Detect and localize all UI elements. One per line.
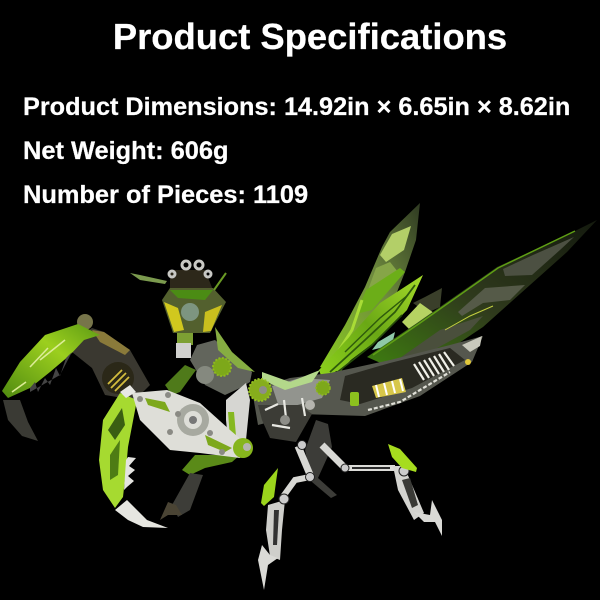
- green claw: left foot: [261, 468, 278, 506]
- pincer: white claw: [115, 500, 168, 528]
- joint: green knee: [233, 438, 253, 458]
- wing: tall upright: [320, 203, 420, 372]
- eyes: [169, 261, 211, 277]
- silver undercarriage: [258, 398, 315, 442]
- raptorial arm: green tibia: [99, 393, 168, 528]
- neck and thorax: [165, 327, 330, 401]
- spec: net weight: Net Weight: 606g: [23, 137, 229, 165]
- back leg: right: [305, 420, 442, 536]
- wing: bright green lattice: [319, 275, 423, 381]
- mid leg: dark lower: [160, 455, 240, 520]
- green gear: rear: [249, 379, 271, 401]
- wing: small pale rear: [402, 288, 442, 330]
- green gear: wing root: [316, 381, 330, 395]
- title: Product Specifications: [113, 16, 507, 57]
- spec: number of pieces: Number of Pieces: 1109: [23, 181, 308, 209]
- spec: dimensions: Product Dimensions: 14.92in × 6.65in × 8.62in: [23, 93, 570, 121]
- wing: long dark: [367, 220, 597, 364]
- antenna: [130, 273, 167, 284]
- upper foreleg: green femur and dark gear: [2, 314, 150, 441]
- back leg: left: [258, 440, 314, 590]
- head: [130, 261, 226, 333]
- raptorial arm: white femur: [120, 385, 253, 458]
- green gear: front: [213, 358, 231, 376]
- strut with green core: [226, 383, 250, 440]
- abdomen with ribs: [252, 336, 483, 442]
- green claw: right foot: [388, 444, 417, 472]
